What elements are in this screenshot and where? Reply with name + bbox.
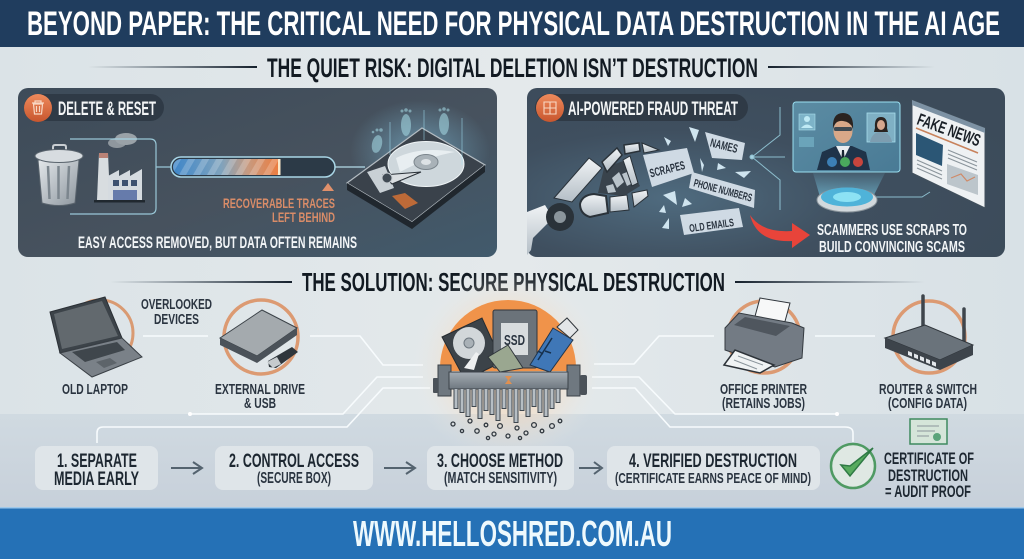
glass shards [659, 127, 751, 229]
caption: scammers use scraps: BUILD CONVINCING SCAMS [819, 239, 965, 256]
step 2: control access: 2. CONTROL ACCESS [229, 451, 359, 472]
panel: AI-powered fraud threat [527, 88, 1005, 257]
caption: certificate of destruction: CERTIFICATE OF [884, 450, 974, 468]
shredder with devices [433, 273, 587, 442]
back of hand [554, 158, 602, 202]
step 2: control access [215, 446, 373, 490]
step 4: verified destruction: 4. VERIFIED DESTRUCTION [629, 451, 797, 472]
arrow: step 2 to 3 [384, 462, 415, 474]
progress bar [171, 157, 335, 177]
icon: green check [831, 444, 875, 488]
step 4: verified destruction: (CERTIFICATE EARNS PEACE OF MIND) [615, 470, 811, 487]
overlooked devices label: DEVICES [154, 312, 199, 328]
paper scrap: old emails [680, 208, 743, 235]
SSD in shredder [493, 310, 537, 368]
heading: the solution: THE SOLUTION: SECURE PHYSICAL DESTRUCTION [302, 267, 725, 297]
overlooked devices label: OVERLOOKED [141, 297, 212, 313]
arrow: step 3 to 4 [579, 462, 602, 474]
USB stick [530, 318, 578, 372]
panel: delete and reset [18, 88, 497, 257]
icon: fake news page: FAKE NEWS [915, 110, 983, 150]
shredder body [433, 365, 587, 396]
footer banner [0, 507, 1024, 559]
icon: factory [94, 133, 145, 202]
device: external drive and USB: & USB [244, 395, 276, 412]
icon: trash can [35, 145, 83, 206]
label: external drive: EXTERNAL DRIVE [215, 381, 305, 398]
icon: fake news page [912, 100, 985, 208]
step 4: verified destruction [607, 446, 820, 490]
pill heading: AI-powered fraud threat [535, 94, 748, 122]
SSD in shredder: SSD [504, 333, 525, 349]
step 3: choose method: (MATCH SENSITIVITY) [444, 470, 557, 487]
forearm [527, 205, 553, 255]
flow connector lines [97, 336, 875, 443]
device: router and switch [879, 296, 977, 412]
icon: hard drive with footprints [347, 100, 490, 229]
label: router and switch: ROUTER & SWITCH [879, 381, 977, 398]
drive in shredder [442, 318, 502, 380]
caption: certificate of destruction: DESTRUCTION [888, 467, 968, 485]
icon: certificate [910, 419, 947, 444]
header banner [0, 0, 1024, 47]
arrow: step 1 to 2 [171, 462, 202, 474]
paper scrap: old emails: OLD EMAILS [689, 217, 735, 235]
middle finger [623, 156, 638, 186]
website address: WWW.HELLOSHRED.COM.AU [353, 513, 672, 554]
arrow: red curved [750, 215, 810, 248]
overlooked devices label [141, 297, 212, 328]
thumb [580, 194, 608, 217]
caption: easy access removed: EASY ACCESS REMOVED, BUT DATA OFTEN REMAINS [78, 234, 357, 252]
connector lines to deepfake screen [750, 107, 930, 210]
paper scrap: phone numbers [689, 172, 755, 208]
hologram screen: deepfake call [793, 102, 900, 212]
step 1: separate media early [35, 446, 158, 490]
caption: certificate of destruction [884, 450, 974, 501]
caption: scammers use scraps [817, 222, 967, 256]
device: old laptop [50, 297, 142, 398]
step 1: separate media early: 1. SEPARATE [57, 451, 137, 472]
bracket connector [70, 139, 171, 214]
shredded particles [451, 419, 562, 440]
wrist joint [546, 203, 574, 231]
step 3: choose method: 3. CHOOSE METHOD [437, 451, 563, 472]
device: external drive and USB [215, 300, 305, 412]
step 2: control access: (SECURE BOX) [257, 470, 331, 487]
pill heading: delete and reset [24, 94, 164, 122]
paper scrap: scrapes: SCRAPES [648, 158, 686, 180]
icon: robot hand [527, 143, 659, 255]
callout: recoverable traces: LEFT BEHIND [272, 209, 335, 225]
callout: recoverable traces [223, 183, 335, 225]
pill heading: AI-powered fraud threat: AI-POWERED FRAUD THREAT [568, 99, 738, 120]
device: office printer: (RETAINS JOBS) [722, 395, 805, 412]
palm interior [598, 160, 640, 196]
device: office printer [720, 298, 807, 412]
label: office printer: OFFICE PRINTER [720, 381, 807, 398]
memory card [488, 345, 523, 372]
callout: recoverable traces: RECOVERABLE TRACES [223, 195, 335, 211]
pill heading: delete and reset: DELETE & RESET [58, 99, 156, 120]
step 3: choose method [427, 446, 574, 490]
paper scrap: scrapes [643, 148, 694, 187]
paper scrap: phone numbers: PHONE NUMBERS [692, 177, 753, 205]
paper scrap: names: NAMES [709, 136, 739, 156]
heading: the quiet risk: THE QUIET RISK: DIGITAL DELETION ISN’T DESTRUCTION [267, 53, 758, 83]
device: router and switch: (CONFIG DATA) [888, 395, 967, 412]
caption: certificate of destruction: = AUDIT PROOF [885, 483, 971, 501]
paper scrap: names [705, 132, 745, 160]
label: old laptop: OLD LAPTOP [62, 381, 128, 398]
shredded strips [456, 389, 558, 423]
index finger [602, 148, 622, 172]
step 1: separate media early: MEDIA EARLY [54, 469, 139, 490]
